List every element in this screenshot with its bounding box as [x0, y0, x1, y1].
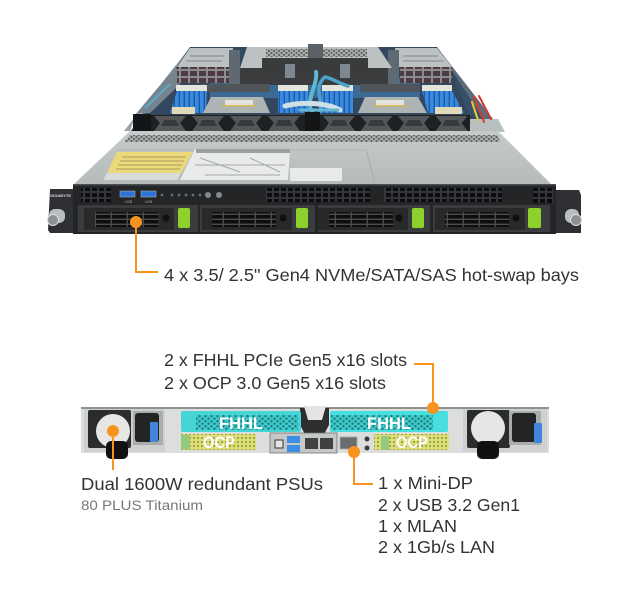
- callout text: rear I/O: 2 x 1Gb/s LAN: [378, 537, 495, 557]
- callout text: expansion slots: 2 x OCP 3.0 Gen5 x16 slots: [164, 373, 386, 393]
- CPU plates: [203, 97, 427, 113]
- callout: expansion slots leader: [414, 364, 439, 414]
- server interior: [124, 44, 505, 132]
- callout text: expansion slots: 2 x FHHL PCIe Gen5 x16 slots: [164, 350, 407, 370]
- rear I/O ports: [270, 433, 370, 453]
- right FHHL slot: [330, 411, 448, 433]
- drive bay 3: [318, 205, 430, 232]
- right ear: [555, 190, 582, 233]
- left ear: GIGABYTE: [50, 193, 71, 198]
- left storage cage: [177, 48, 240, 84]
- left side wall: [124, 47, 190, 131]
- status buttons: [161, 192, 222, 198]
- memory modules: [170, 85, 464, 114]
- callout: PSU leader: [107, 425, 119, 470]
- yellow warning label: [103, 152, 193, 180]
- USB ports: USB: [125, 200, 133, 204]
- left OCP slot: [181, 433, 256, 452]
- callout: rear I/O leader: [348, 446, 373, 484]
- drive bay 1: [78, 205, 198, 232]
- left OCP slot: OCP: [203, 433, 235, 452]
- USB ports: [120, 191, 156, 204]
- callout text: PSUs: 80 PLUS Titanium: [81, 497, 203, 513]
- callout text: rear I/O: 1 x Mini-DP: [378, 473, 473, 493]
- callout text: rear I/O: 1 x MLAN: [378, 516, 457, 536]
- center latch: [300, 406, 329, 438]
- callout: drive bays leader: [130, 216, 158, 272]
- left ear: [48, 189, 75, 233]
- USB ports: USB: [145, 200, 153, 204]
- drive bay 2: [200, 205, 315, 232]
- chassis lid: [73, 131, 552, 185]
- callout text: PSUs: Dual 1600W redundant PSUs: [81, 474, 323, 494]
- right OCP slot: OCP: [396, 433, 428, 452]
- right FHHL slot: FHHL: [367, 414, 411, 433]
- right OCP slot: [374, 433, 449, 452]
- right side wall: [437, 47, 500, 132]
- callout text: PSUs: [81, 474, 323, 513]
- callout text: drive bays: 4 x 3.5/ 2.5" Gen4 NVMe/SATA/SAS hot-swap bays: [164, 265, 579, 285]
- callout text: rear I/O: 2 x USB 3.2 Gen1: [378, 495, 520, 515]
- left FHHL slot: FHHL: [219, 414, 263, 433]
- right power supply: [463, 409, 547, 459]
- riser cage: [240, 44, 392, 78]
- right storage cage: [388, 48, 452, 84]
- callout text: expansion slots: [164, 350, 407, 393]
- front server view: [48, 44, 582, 234]
- left FHHL slot: [181, 411, 301, 433]
- callout text: rear I/O: [378, 473, 520, 557]
- rear server view: [81, 406, 549, 459]
- white installation label: [180, 149, 342, 181]
- left power supply: [84, 409, 165, 459]
- cables: [285, 72, 491, 122]
- drive bay 4: [433, 205, 550, 232]
- fan row: [133, 112, 470, 132]
- front panel: [73, 184, 556, 234]
